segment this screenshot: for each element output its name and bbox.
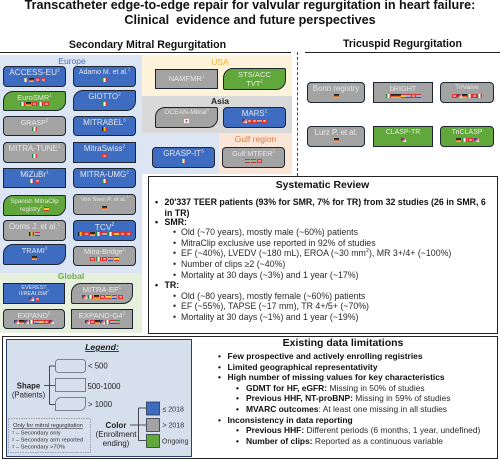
bullet list: review findings: [155, 196, 486, 322]
footnote legend: 2: [12, 436, 15, 442]
study: MitraSwiss: [73, 142, 136, 163]
label: Asia: Asia: [211, 96, 229, 106]
legend title: Legend:: [85, 342, 119, 352]
study: GRASP-IT: [152, 147, 215, 168]
bullet list: review findings: •: [173, 259, 176, 269]
study: NAMFMR: [155, 69, 218, 89]
study: ACCESS-EU: ACCESS-EU2: [9, 68, 60, 76]
bullet list: review findings: •: [173, 270, 176, 280]
study: STS/ACC TVT: STS/ACC: [238, 70, 271, 79]
bullet list: review findings: TR:: [164, 280, 179, 290]
heading: existing data limitations: Existing data limitations: [283, 337, 403, 349]
panel: systematic review: [148, 176, 498, 334]
study: MitraSwiss: MitraSwiss2: [84, 144, 125, 152]
label: Gulf region: Gulf region: [235, 134, 276, 144]
panel: Europe region: [0, 55, 142, 273]
study: STS/ACC TVT: TVT2: [246, 78, 263, 88]
bullet list: limitations: Inconsistency in data reporting: [228, 415, 353, 425]
study: Von Stein P. et al.: Von Stein P. et al.1: [81, 194, 128, 202]
study: NAMFMR: NAMFMR1: [169, 73, 204, 83]
study: TRAMI: TRAMI3: [22, 245, 47, 254]
color legend: Ongoing: [162, 438, 189, 446]
study: Spanish MitraClip registry: registry2: [20, 204, 42, 212]
bullet list: limitations: •: [236, 436, 239, 446]
study: MiZuBr: MiZuBr1: [20, 170, 49, 178]
panel: USA region: [142, 55, 292, 96]
bullet list: review findings: •: [173, 238, 176, 248]
bullet list: limitations: •: [218, 372, 221, 382]
bullet list: review findings: •: [173, 312, 176, 322]
study: TriValve: [440, 82, 494, 103]
bullet list: limitations: Number of clips: Reported as a continuous variable: [246, 436, 443, 446]
study: bRIGHT: bRIGHT: [390, 84, 416, 92]
bullet list: review findings: •: [173, 291, 176, 301]
study: Lurz P. et al.: Lurz P. et al.: [315, 128, 357, 136]
panel: Asia region: [142, 96, 292, 133]
shape legend: 500-1000: [88, 382, 121, 391]
study: Bonn registry: Bonn registry: [313, 84, 359, 92]
bullet list: limitations: •: [218, 415, 221, 425]
study: MITRA-EF: [71, 283, 133, 304]
study: EVEREST II/REALISM: II/REALISM2: [19, 289, 49, 297]
study: TriCLASP: TriCLASP: [452, 128, 482, 136]
study: GIOTTO: GIOTTO2: [88, 91, 121, 100]
label: USA: USA: [211, 57, 229, 67]
study: Adamo M. et al.: Adamo M. et al.1: [79, 66, 130, 76]
shape legend: [12, 360, 121, 410]
study: TCV: [73, 220, 136, 241]
study: MITRABEL: [73, 116, 136, 136]
bullet list: limitations: •: [236, 383, 239, 393]
color legend: [96, 402, 189, 448]
study: Ooms J. et al.: Ooms J. et al.1: [9, 222, 60, 230]
shape legend: (Patients): [12, 390, 46, 400]
heading: tricuspid regurgitation: Tricuspid Regurgitation: [343, 38, 462, 50]
study: EuroSMR: [3, 91, 66, 111]
study: CLASP-TR: CLASP-TR: [386, 128, 420, 136]
study: GRASP: [3, 116, 66, 136]
study: Ooms J. et al.: [3, 220, 66, 241]
color legend: ending): [103, 439, 130, 448]
study: TriValve: TriValve: [455, 84, 479, 90]
shape legend: > 1000: [88, 400, 113, 409]
study: MITRA-TUNE: MITRA-TUNE1: [8, 144, 60, 152]
study: EXPAND-G4: EXPAND-G42: [79, 310, 125, 320]
heading: secondary mitral regurgitation: Secondary Mitral Regurgitation: [69, 39, 226, 51]
bullet list: limitations: [218, 351, 480, 446]
bullet list: limitations: Few prospective and actively enrolling registries: [228, 351, 423, 361]
bullet list: review findings: •: [155, 217, 158, 227]
bullet list: review findings: •: [173, 248, 176, 258]
bullet list: review findings: EF (~40%), LVEDV (~180 mL), EROA (~30 mm2), MR 3+/4+ (~100%): [181, 248, 451, 258]
bullet list: limitations: Previous HHF, NT-proBNP: Missing in 59% of studies: [246, 393, 450, 403]
shape legend: Shape: [17, 382, 41, 390]
study: ACCESS-EU: [3, 66, 66, 87]
panel: legend: [6, 339, 192, 457]
study: OCEAN-Mitral: [155, 107, 218, 128]
color legend: > 2018: [162, 422, 184, 430]
study: Mitra-Bridge: Mitra-Bridge1: [84, 246, 125, 256]
panel: Gulf region: [219, 133, 292, 174]
title: Clinical evidence and future perspectives: [124, 13, 376, 27]
panel: existing data limitations: [2, 336, 498, 459]
bullet list: review findings: EF (~55%), TAPSE (~17 mm), TR 4+/5+ (~70%): [181, 301, 369, 311]
study: MITRABEL: MITRABEL3: [83, 118, 126, 126]
bullet list: review findings: in TR): [164, 208, 189, 218]
study: Gulf MTEER: [222, 147, 285, 168]
study: CLASP-TR: [373, 126, 433, 147]
bullet list: limitations: MVARC outcomes: At least one missing in all studies: [246, 404, 447, 414]
bullet list: review findings: Number of clips ≥2 (~40%): [181, 259, 285, 269]
study: STS/ACC TVT: [223, 68, 286, 90]
study: Von Stein P. et al.: [73, 194, 136, 215]
footnote legend: [8, 418, 90, 452]
bullet list: review findings: •: [155, 280, 158, 290]
study: EXPAND: [3, 309, 65, 329]
footnote legend: – Secondary arm reported: [14, 438, 83, 444]
bullet list: review findings: Old (~70 years), mostly male (~60%) patients: [181, 227, 358, 237]
study: MITRA-EF: MITRA-EF1: [83, 284, 121, 294]
bullet list: limitations: •: [236, 404, 239, 414]
bullet list: review findings: •: [155, 196, 158, 206]
study: TRAMI: [3, 244, 66, 265]
study: Mitra-Bridge: [73, 246, 136, 266]
bullet list: limitations: •: [218, 362, 221, 372]
bullet list: review findings: •: [173, 301, 176, 311]
study: EXPAND: EXPAND2: [18, 310, 50, 320]
bullet list: review findings: 20'337 TEER patients (93% for SMR, 7% for TR) from 32 studies (26 in SMR, 6: [164, 196, 486, 206]
color legend: ≤ 2018: [162, 406, 184, 414]
bullet list: limitations: Limited geographical representativity: [228, 362, 378, 372]
label: Global: Global: [58, 271, 84, 281]
study: GRASP: GRASP2: [21, 117, 48, 126]
color legend: (Enrollment: [96, 430, 137, 439]
study: EuroSMR: EuroSMR1: [17, 92, 52, 102]
study: MARS: [223, 107, 286, 128]
study: Gulf MTEER: Gulf MTEER2: [232, 148, 275, 158]
study: Bonn registry: [307, 82, 365, 103]
bullet list: limitations: High number of missing values for key characteristics: [228, 372, 445, 382]
study: MITRA-TUNE: [3, 142, 66, 163]
bullet list: review findings: Old (~80 years), mostly female (~60%) patients: [181, 291, 365, 301]
bullet list: review findings: MitraClip exclusive use reported in 92% of studies: [181, 238, 376, 248]
bullet list: review findings: •: [173, 227, 176, 237]
study: Lurz P. et al.: [307, 126, 365, 147]
footnote legend: – Secondary only: [14, 430, 61, 436]
study: GRASP-IT: GRASP-IT3: [163, 148, 204, 158]
bullet list: limitations: GDMT for HF, eGFR: Missing in 50% of studies: [246, 383, 425, 393]
bullet list: limitations: Previous HHF: Different periods (6 months, 1 year, undefined): [246, 425, 480, 435]
study: MiZuBr: [3, 168, 66, 188]
study: EVEREST II/REALISM: EVEREST: [21, 285, 47, 291]
study: EVEREST II/REALISM: [3, 283, 65, 304]
title: [24, 0, 475, 27]
study: bRIGHT: [373, 82, 433, 103]
panel: Asia continuation: [142, 133, 219, 174]
bullet list: review findings: Mortality at 30 days (~3%) and 1 year (~17%): [181, 270, 358, 280]
study: Adamo M. et al.: [73, 66, 136, 87]
bullet list: review findings: Mortality at 30 days (~1%) and 1 year (~19%): [181, 312, 358, 322]
footnote legend: – Secondary >70%: [14, 444, 65, 450]
footnote legend: 3: [12, 444, 15, 448]
study: GIOTTO: [73, 90, 136, 111]
color legend: Color: [106, 421, 126, 430]
study: TCV: TCV2: [95, 222, 114, 232]
study: MITRA-UMG: [73, 168, 136, 188]
footnote legend: 1: [12, 430, 15, 434]
study: Spanish MitraClip registry: [3, 195, 66, 216]
label: Europe: Europe: [58, 56, 86, 66]
panel: Global region: [0, 273, 142, 333]
bullet list: limitations: •: [218, 351, 221, 361]
study: Spanish MitraClip registry: Spanish MitraClip: [10, 198, 59, 205]
shape legend: < 500: [88, 362, 108, 370]
study: MARS: MARS2: [242, 108, 267, 118]
footnote legend: Only for mitral regurgitation: [13, 423, 83, 429]
study: EXPAND-G4: [71, 309, 133, 329]
study: MITRA-UMG: MITRA-UMG2: [80, 170, 129, 178]
bullet list: review findings: SMR:: [164, 217, 187, 227]
heading: systematic review: Systematic Review: [276, 180, 369, 191]
study: TriCLASP: [440, 126, 494, 147]
bullet list: limitations: •: [236, 393, 239, 403]
bullet list: limitations: •: [236, 425, 239, 435]
